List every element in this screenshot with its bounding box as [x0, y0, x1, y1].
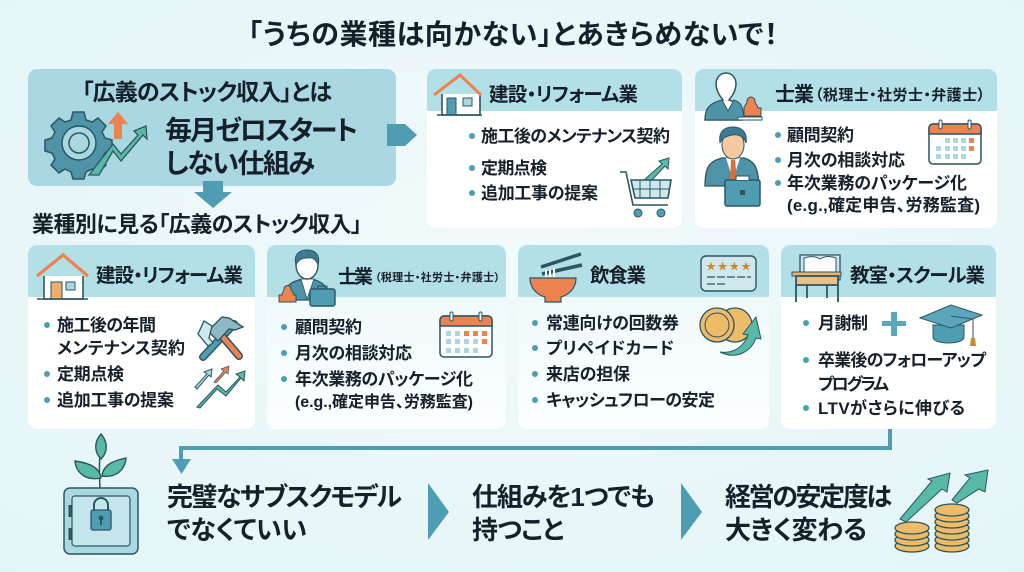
bullet list [469, 126, 670, 203]
bullet list [532, 314, 715, 410]
summary step 2 [472, 482, 655, 545]
arrow: down to section heading [194, 181, 232, 208]
icon: coin stacks with rising arrows [895, 470, 988, 552]
bullet list: 年次業務のパッケージ化 [295, 369, 473, 389]
heading: 教室・スクール業 [850, 265, 985, 287]
bullet list [281, 318, 473, 411]
icon: shopping cart with arrow [620, 158, 671, 217]
section heading: 業種別に見る「広義のストック収入」 [32, 212, 362, 237]
bullet list: プログラム [818, 374, 890, 394]
icon: house [434, 75, 482, 115]
heading: 士業 [775, 83, 814, 106]
icon: graduation cap [920, 305, 982, 346]
bullet list: 追加工事の提案 [481, 184, 598, 203]
icon: coins with return arrow [700, 308, 761, 355]
icon: book on desk [792, 255, 841, 302]
summary step 3: 大きく変わる [725, 515, 867, 545]
summary step 1 [167, 482, 402, 545]
summary step 2: 持つこと [472, 515, 564, 545]
icon: calendar [929, 120, 981, 164]
arrow: step 1 to 2 [428, 483, 449, 540]
icon: house [37, 255, 88, 299]
bullet list: 卒業後のフォローアップ [818, 350, 987, 370]
panel: professionals top card [695, 69, 997, 228]
heading: 建設・リフォーム業 [489, 84, 638, 106]
icon: gear and rising arrows [45, 112, 147, 179]
bullet list: 月謝制 [818, 314, 868, 333]
bullet list: (e.g.,確定申告、労務監査) [787, 195, 980, 215]
bullet list: 年次業務のパッケージ化 [787, 173, 967, 193]
bullet list: 月次の相談対応 [295, 344, 412, 363]
arrow: step 2 to 3 [681, 483, 702, 540]
icon: rising arrows [195, 366, 245, 408]
bullet list: 施工後のメンテナンス契約 [481, 126, 670, 146]
bullet list: メンテナンス契約 [57, 339, 185, 358]
bullet list: 定期点検 [57, 365, 124, 384]
icon: review card: ★★★★ [706, 262, 751, 273]
title: 「うちの業種は向かない」とあきらめないで！ [248, 19, 778, 50]
heading: 飲食業 [590, 265, 646, 287]
icon: calendar [440, 312, 492, 357]
bullet list: 定期点検 [481, 159, 547, 178]
bullet list: 来店の担保 [546, 365, 630, 384]
bullet list: 顧問契約 [787, 126, 854, 145]
bullet list: 施工後の年間 [57, 315, 156, 335]
bullet list: 月次の相談対応 [787, 151, 905, 170]
summary step 1: 完璧なサブスクモデル [167, 482, 402, 512]
icon: review card [701, 256, 756, 291]
heading: 建設・リフォーム業 [96, 265, 243, 287]
icon: hammer and wrench [198, 317, 243, 357]
panel: definition [28, 69, 396, 186]
heading: 士業 [338, 266, 373, 288]
icon: businessman with stamp and briefcase [279, 250, 335, 306]
bullet list [775, 126, 980, 215]
icon: silhouette with stamp [705, 73, 762, 120]
icon: businessman with briefcase [705, 127, 760, 206]
summary step 3: 経営の安定度は [725, 482, 892, 512]
summary step 2: 仕組みを1つでも [472, 482, 655, 512]
bullet list: (e.g.,確定申告、労務監査) [295, 392, 473, 411]
definition heading: 「広義のストック収入」とは [82, 79, 332, 105]
summary step 1: でなくていい [167, 515, 307, 545]
icon: safe with plant [64, 434, 138, 554]
panel: definition: しない仕組み [165, 149, 315, 179]
summary step 3 [725, 482, 892, 545]
arrow: connector to summary [172, 429, 890, 474]
panel: construction top card [427, 69, 682, 228]
bullet list: LTVがさらに伸びる [818, 398, 965, 418]
bullet list: プリペイドカード [546, 339, 674, 358]
bullet list [44, 315, 185, 410]
panel: professionals top card: （税理士・社労士・弁護士） [815, 86, 985, 104]
panel: school card [781, 245, 996, 429]
panel: professionals card [267, 245, 506, 429]
arrow: right to top cards [387, 124, 417, 146]
bullet list: 顧問契約 [295, 318, 362, 337]
icon: noodle bowl [530, 254, 582, 302]
bullet list: キャッシュフローの安定 [546, 391, 715, 410]
bullet list: 常連向けの回数券 [546, 314, 679, 333]
panel: restaurant card [518, 245, 769, 429]
panel: professionals card: （税理士・社労士・弁護士） [375, 270, 500, 284]
icon: plus [882, 312, 906, 336]
bullet list: 追加工事の提案 [57, 391, 174, 410]
bullet list [803, 314, 987, 418]
definition main text: 毎月ゼロスタート [165, 115, 358, 146]
panel: construction card [28, 245, 255, 429]
